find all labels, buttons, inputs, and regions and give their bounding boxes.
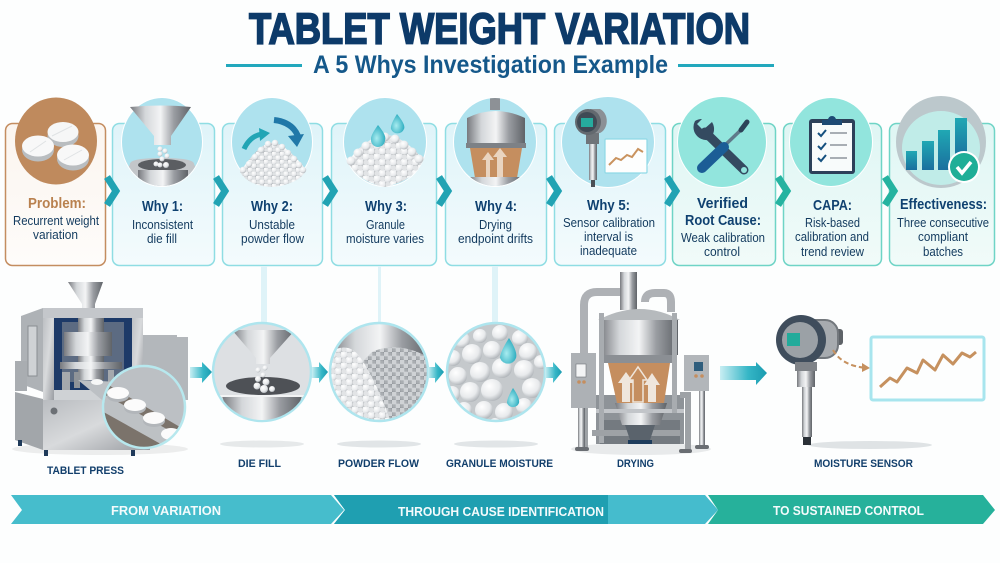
banner: to sustained control: [708, 495, 995, 524]
text: capa: trend review: [801, 245, 865, 259]
heading: why 1: Why 1:: [142, 198, 183, 215]
text: effectiveness: batches: [923, 245, 963, 259]
control panel right: [684, 355, 709, 391]
panel: capa: [784, 97, 882, 266]
banner: to sustained control: TO SUSTAINED CONTROL: [773, 503, 924, 518]
heading: why 4: Why 4:: [475, 198, 517, 215]
text: capa: Risk-based: [805, 216, 860, 230]
arrow: press to die fill: [190, 362, 212, 383]
text: problem description: Recurrent weight: [13, 214, 99, 228]
illustration: moisture sensor: [776, 315, 932, 449]
magnified tablets inset: [100, 366, 190, 452]
label: powder flow: POWDER FLOW: [338, 458, 420, 470]
text: why 3: Granule: [366, 218, 405, 232]
arrow: granule moisture to drying: [545, 362, 562, 383]
banner: from variation: [11, 495, 344, 524]
illustration: fluid bed dryer: [571, 272, 711, 455]
heading: effectiveness: Effectiveness:: [900, 196, 987, 213]
icon: bar chart with check: [896, 96, 986, 188]
label: tablet press: TABLET PRESS: [47, 465, 124, 477]
panel: why 4: [446, 97, 546, 266]
image: die fill: [213, 323, 311, 448]
panel: why 5: [554, 96, 666, 266]
heading: why 2: Why 2:: [251, 198, 293, 215]
icon: wrench and screwdriver: [677, 96, 767, 188]
heading: why 3: Why 3:: [365, 198, 407, 215]
text: why 5: inadequate: [580, 244, 637, 258]
text: root cause: Weak calibration: [681, 231, 765, 245]
connector lines from cards to process images: [261, 266, 498, 323]
label: granule moisture: GRANULE MOISTURE: [446, 458, 553, 470]
icon: sensor and trend: [561, 96, 655, 188]
illustration: tablet press: [12, 282, 190, 456]
heading: verified root cause: Verified: [697, 195, 748, 212]
chart: moisture trend: [871, 337, 984, 400]
text: why 2: Unstable: [249, 218, 295, 232]
subtitle with rules: A 5 Whys Investigation Example: [313, 51, 668, 79]
icon: hopper and die: [120, 97, 205, 188]
text: why 5: Sensor calibration: [563, 216, 655, 230]
heading: verified root cause: Root Cause:: [685, 212, 761, 229]
icon: dryer: [453, 97, 537, 191]
text: why 2: powder flow: [241, 232, 305, 246]
text: why 4: endpoint drifts: [458, 232, 533, 246]
text: problem description: variation: [33, 228, 78, 242]
icon: clipboard checklist: [789, 97, 873, 187]
text: why 1: Inconsistent: [132, 218, 193, 232]
control panel left: [571, 353, 596, 408]
text: why 5: interval is: [584, 230, 633, 244]
image: powder flow: [330, 323, 430, 448]
banner: through cause identification: THROUGH CAUSE IDENTIFICATION: [398, 504, 604, 519]
icon: powder pile and arrows: [231, 97, 313, 187]
heading: why 5: Why 5:: [587, 197, 630, 214]
panel: verified root cause: [672, 96, 776, 266]
image: granule moisture: [444, 323, 548, 448]
text: capa: calibration and: [795, 230, 869, 244]
label: drying: DRYING: [617, 458, 654, 470]
icon: tablets: [15, 98, 97, 184]
panel: why 2: [222, 97, 322, 266]
arrow: die fill to powder flow: [312, 362, 328, 383]
arrow: drying to moisture sensor: [720, 362, 767, 385]
heading: capa: CAPA:: [813, 197, 852, 214]
heading: problem: Problem:: [28, 195, 86, 212]
arrow: powder flow to granule moisture: [428, 362, 444, 383]
text: effectiveness: Three consecutive: [897, 216, 989, 230]
text: why 1: die fill: [147, 232, 177, 246]
chevron arrows between cards: [107, 177, 894, 205]
panel: effectiveness: [890, 96, 994, 266]
label: moisture sensor: MOISTURE SENSOR: [814, 458, 913, 470]
panel: why 3: [332, 97, 436, 266]
text: root cause: control: [704, 245, 740, 259]
icon: moist granules: [343, 97, 427, 187]
text: why 4: Drying: [479, 218, 512, 232]
banner: through cause identification: [334, 495, 718, 524]
banner: from variation: FROM VARIATION: [111, 503, 221, 518]
title: TABLET WEIGHT VARIATION: [249, 4, 750, 54]
label: die fill: DIE FILL: [238, 458, 281, 470]
text: effectiveness: compliant: [918, 230, 968, 244]
text: why 3: moisture varies: [346, 232, 424, 246]
subtitle with rules: [226, 51, 774, 79]
panel: why 1: [112, 97, 214, 266]
panel: problem: [6, 98, 106, 266]
